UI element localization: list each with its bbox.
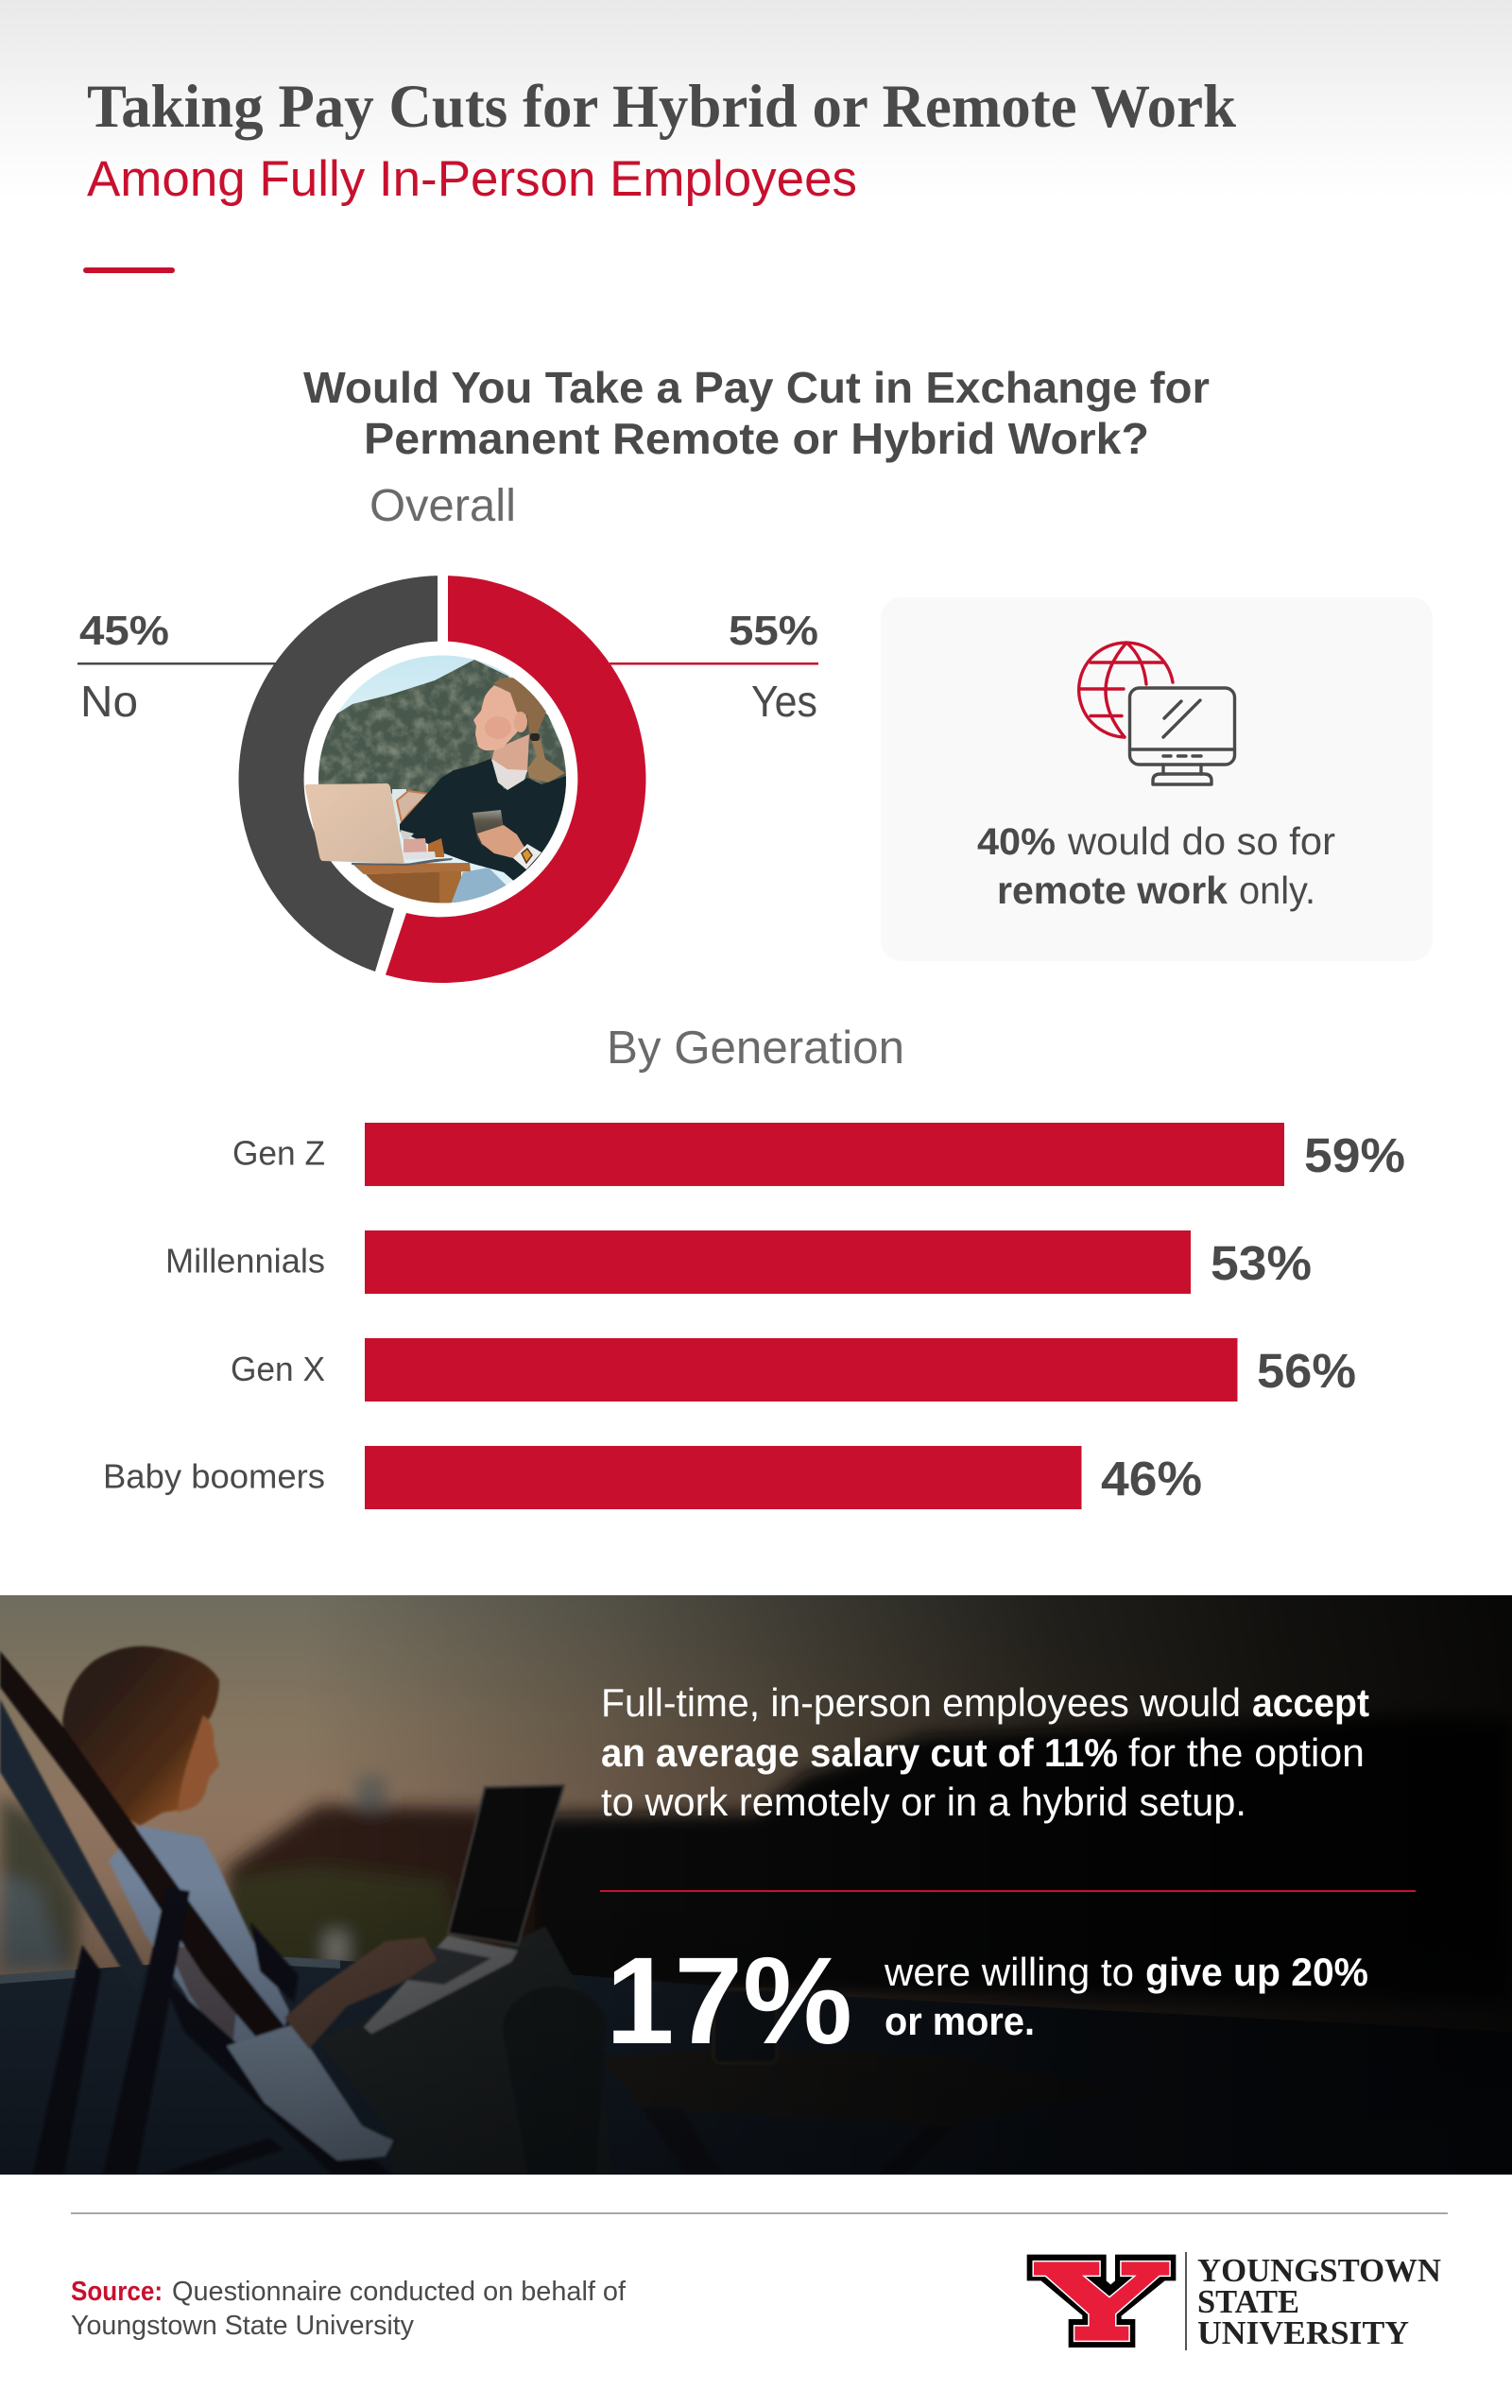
panel text: 40% — [977, 821, 1056, 863]
panel text: only. — [1239, 869, 1315, 912]
donut chart: overall — [77, 576, 818, 983]
bar: Gen X: 56% — [1257, 1344, 1356, 1398]
big number: 17%: 17% — [606, 1931, 852, 2070]
question heading — [303, 363, 1210, 463]
header gradient — [0, 0, 1512, 198]
bar: Baby boomers: 46% — [1101, 1452, 1202, 1505]
bar: Gen Z — [232, 1123, 1405, 1186]
heading: by generation: By Generation — [607, 1023, 904, 1074]
dark overlay — [374, 1595, 1512, 2175]
heading: overall: Overall — [369, 481, 516, 531]
banner secondary text: were willing to — [884, 1950, 1134, 1994]
bar chart: by generation — [103, 1123, 1405, 1509]
banner secondary text: or more. — [885, 1999, 1035, 2043]
laptop — [305, 783, 404, 864]
source note: Youngstown State University — [71, 2311, 414, 2341]
logo: Youngstown State University — [1027, 2252, 1441, 2351]
subtitle: Among Fully In-Person Employees — [87, 151, 857, 207]
panel text — [977, 819, 1335, 912]
logo: Youngstown State University: STATE — [1197, 2283, 1299, 2320]
bar: Gen X: Gen X — [231, 1350, 325, 1388]
banner statement text: for the option — [1128, 1730, 1365, 1775]
banner statement text — [601, 1680, 1369, 1824]
label: yes: 55% — [729, 608, 818, 654]
banner statement text: an average salary cut of 11% — [601, 1730, 1118, 1775]
donut segment: no 45% — [239, 576, 438, 972]
panel: salary cut photo banner — [0, 1595, 1512, 2182]
label: no: No — [80, 677, 138, 726]
bar: Millennials: 53% — [1211, 1236, 1312, 1290]
footer rule — [71, 2212, 1448, 2214]
icon: globe and monitor — [1079, 643, 1234, 784]
source note — [71, 2277, 627, 2341]
banner divider — [600, 1890, 1416, 1892]
panel text: would do so for — [1067, 819, 1335, 863]
label: no: 45% — [79, 608, 169, 654]
source note: Source: — [71, 2277, 163, 2307]
question heading: Permanent Remote or Hybrid Work? — [364, 414, 1149, 463]
banner statement text: to work remotely or in a hybrid setup. — [601, 1780, 1246, 1824]
banner secondary text — [885, 1956, 1367, 2036]
photo: woman with laptop — [305, 655, 569, 907]
red accent rule — [83, 267, 175, 273]
banner secondary text: give up 20% — [1145, 1950, 1368, 1994]
logo: Youngstown State University: UNIVERSITY — [1197, 2314, 1409, 2351]
banner statement text: Full-time, in-person employees would — [601, 1680, 1241, 1725]
bar: Millennials — [165, 1230, 1312, 1294]
donut segment: yes 55% — [386, 576, 645, 983]
label: yes: Yes — [751, 677, 817, 726]
logo: Youngstown State University: YOUNGSTOWN — [1197, 2252, 1441, 2289]
bar: Gen Z: Gen Z — [232, 1134, 325, 1172]
bar: Baby boomers — [103, 1446, 1202, 1509]
bar: Baby boomers: Baby boomers — [103, 1457, 325, 1495]
panel: remote work stat — [881, 597, 1433, 961]
title block — [83, 73, 1237, 273]
bar: Gen Z: 59% — [1304, 1128, 1405, 1182]
source note: Questionnaire conducted on behalf of — [172, 2277, 627, 2307]
label: no — [77, 608, 278, 726]
photo: woman on deck chair at sunset — [0, 1595, 1512, 2182]
banner statement text: accept — [1252, 1680, 1369, 1725]
question heading: Would You Take a Pay Cut in Exchange for — [303, 363, 1210, 412]
bar: Millennials: Millennials — [165, 1242, 325, 1280]
title: Taking Pay Cuts for Hybrid or Remote Work — [87, 73, 1237, 141]
label: yes — [610, 608, 818, 726]
panel text: remote work — [997, 869, 1228, 912]
icon: block Y — [1027, 2255, 1176, 2348]
bar: Gen X — [231, 1338, 1356, 1402]
